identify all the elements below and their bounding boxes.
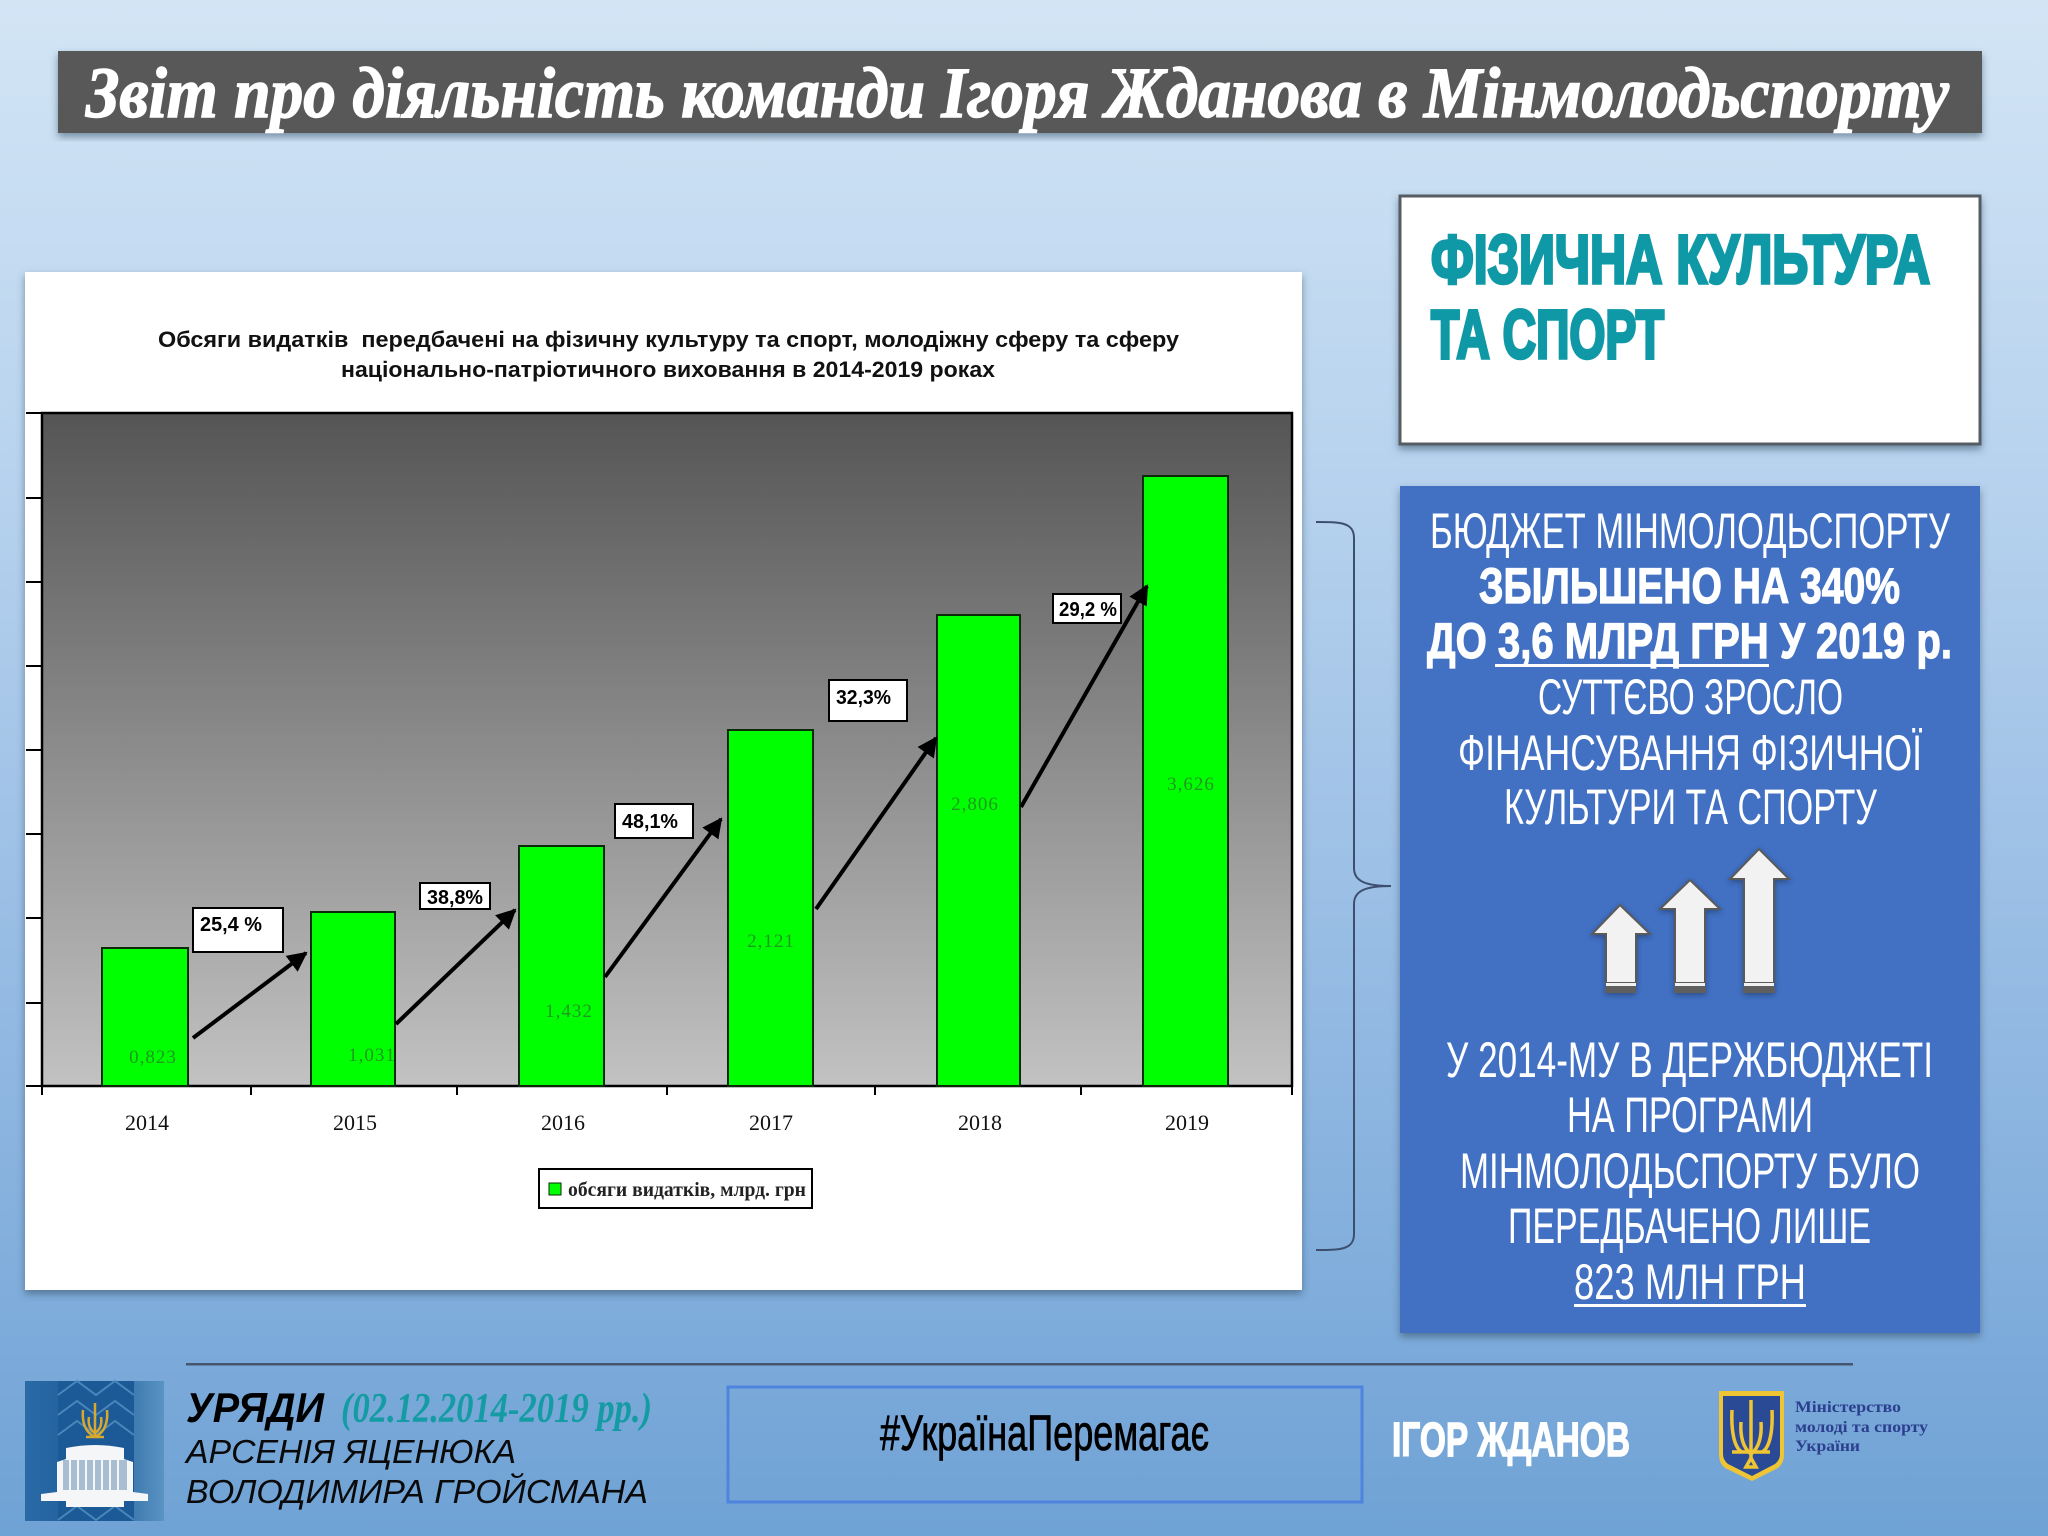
year labels: 2014 [125, 1110, 169, 1135]
ministry name: України [1795, 1438, 1860, 1455]
year labels: 2018 [958, 1110, 1002, 1135]
growth labels: 32,3% [836, 687, 891, 709]
hashtag box: #УкраїнаПеремагає [880, 1405, 1209, 1461]
growth labels: 38,8% [427, 887, 483, 909]
icon: government building logo [25, 1381, 164, 1521]
budget text: КУЛЬТУРИ ТА СПОРТУ [1504, 779, 1877, 835]
bar values: 3,626 [1167, 774, 1215, 795]
legend: обсяги видатків, млрд. грн [568, 1179, 806, 1201]
ministry logo [1719, 1391, 1928, 1481]
growth labels: 29,2 % [1059, 599, 1117, 621]
bar values: 2,121 [747, 931, 795, 952]
hashtag box [728, 1387, 1362, 1502]
bar values [129, 774, 1215, 1068]
budget text [1427, 503, 1952, 835]
government label [184, 1384, 652, 1510]
ministry name [1795, 1399, 1928, 1455]
bar values: 1,432 [545, 1001, 593, 1022]
axis ticks [26, 413, 1292, 1095]
budget text: СУТТЄВО ЗРОСЛО [1538, 669, 1843, 725]
legend [539, 1169, 812, 1208]
chart title: Обсяги видатків передбачені на фізичну культуру та спорт, молодіжну сферу та сферу [158, 327, 1180, 352]
bar values: 2,806 [951, 794, 999, 815]
year labels: 2015 [333, 1110, 377, 1135]
ministry name: молоді та спорту [1795, 1419, 1928, 1436]
panel: budget [1400, 486, 1980, 1333]
government label: (02.12.2014-2019 рр.) [341, 1386, 652, 1432]
year labels [125, 1110, 1209, 1135]
bar values: 0,823 [129, 1047, 177, 1068]
icon: rising arrows [1592, 849, 1789, 993]
growth labels: 25,4 % [200, 914, 262, 936]
year labels: 2017 [749, 1110, 793, 1135]
2014 text: НА ПРОГРАМИ [1567, 1087, 1813, 1143]
growth labels [193, 594, 1121, 952]
chart title [158, 327, 1180, 382]
budget text: ЗБІЛЬШЕНО НА 340% [1479, 558, 1900, 614]
ministry name: Міністерство [1795, 1399, 1901, 1416]
bar chart [102, 476, 1228, 1086]
plot area [42, 413, 1292, 1086]
year labels: 2019 [1165, 1110, 1209, 1135]
bracket [1316, 522, 1391, 1250]
panel: section heading [1400, 196, 1980, 444]
chart title: національно-патріотичного виховання в 2014-2019 роках [341, 357, 996, 382]
2014 text: 823 МЛН ГРН [1574, 1254, 1806, 1310]
panel: section heading: ТА СПОРТ [1431, 296, 1664, 373]
year labels: 2016 [541, 1110, 585, 1135]
2014 text [1446, 1032, 1933, 1310]
name label: ІГОР ЖДАНОВ [1392, 1414, 1630, 1467]
government label: УРЯДИ [186, 1384, 325, 1431]
growth arrows [193, 586, 1147, 1038]
growth labels: 48,1% [622, 811, 678, 833]
bar values: 1,031 [348, 1045, 396, 1066]
panel: chart [25, 272, 1302, 1290]
footer divider [186, 1363, 1853, 1366]
government label: АРСЕНІЯ ЯЦЕНЮКА [184, 1433, 516, 1470]
icon: coat of arms [1719, 1391, 1784, 1481]
2014 text: ПЕРЕДБАЧЕНО ЛИШЕ [1508, 1198, 1871, 1254]
government label: ВОЛОДИМИРА ГРОЙСМАНА [186, 1472, 648, 1510]
